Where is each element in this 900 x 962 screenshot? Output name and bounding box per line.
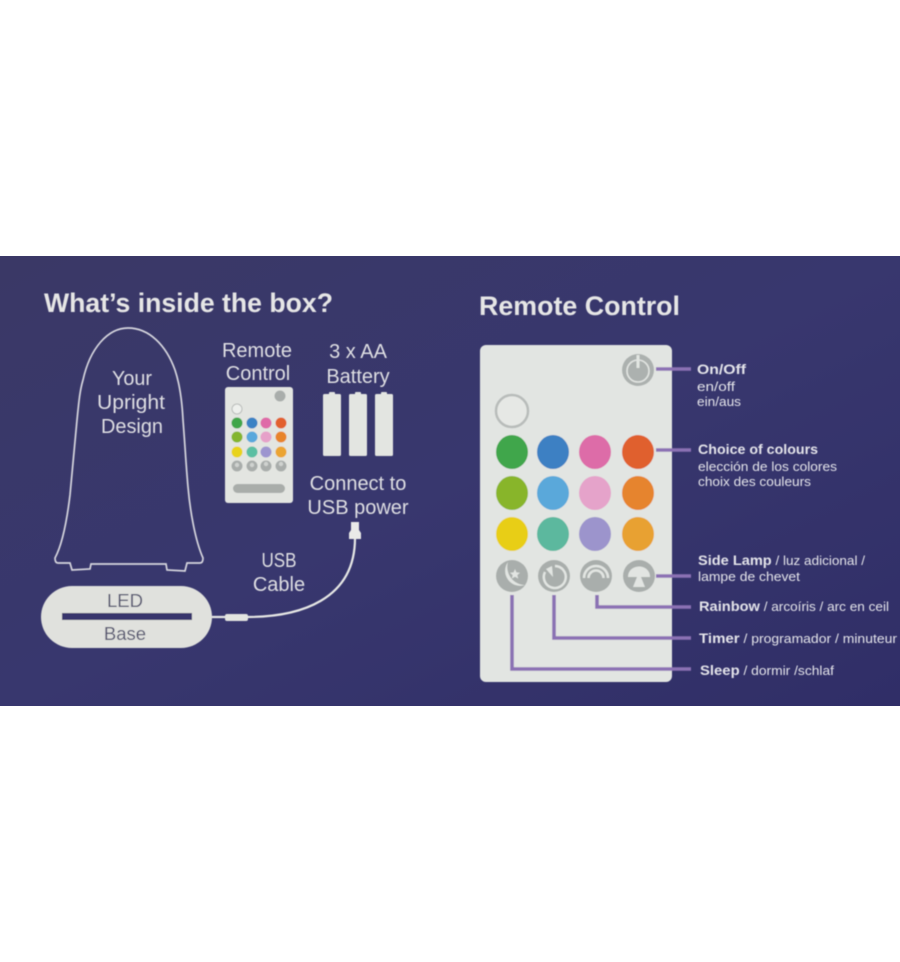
colour buttons [496,435,654,551]
heading: remote control: Remote Control [479,291,680,321]
icon: LED base [41,586,212,648]
label: 3 x AA battery: Battery [326,366,390,388]
icon: USB cable and plug [212,522,361,621]
label: remote control: Control [226,363,290,385]
button: side lamp [623,560,655,592]
panel: what's inside the box [41,288,409,648]
label: your upright design: Design [101,416,163,438]
label: USB cable: USB [262,550,296,572]
callout: choice of colours [698,442,838,489]
label: your upright design: Upright [97,392,165,414]
label: connect to USB power: USB power [307,497,409,519]
button: power [622,354,654,386]
label: remote control: Remote [222,340,292,362]
button: white [496,395,528,427]
callout: choice of colours: elección de los colores [698,459,838,474]
label: your upright design: Your [112,368,152,390]
panel: dark blue banner [0,256,900,706]
icon: LED base: LED [107,590,143,611]
callout lines [512,369,691,669]
callout: side lamp: Side Lamp / luz adicional / [698,552,865,568]
callout: side lamp: lampe de chevet [698,569,800,584]
callout: on/off: On/Off [697,362,747,377]
heading: what's inside the box: What’s inside the box? [44,288,333,318]
panel: remote control [479,291,898,682]
callout: on/off: ein/aus [697,394,742,409]
icon: LED base: Base [104,623,146,644]
callout: on/off: en/off [697,379,735,394]
callout: sleep: Sleep / dormir /schlaf [700,662,834,678]
callout: timer: Timer / programador / minuteur [699,630,898,646]
icon: small remote control [225,387,293,503]
callout: choice of colours: choix des couleurs [698,474,812,489]
label: USB cable: Cable [253,574,305,596]
label: USB cable [253,550,305,596]
button: rainbow [580,560,612,592]
remote control body [480,345,672,682]
label: connect to USB power [307,473,409,519]
callout: on/off [697,362,747,409]
callout: rainbow: Rainbow / arcoíris / arc en ceil [699,598,889,614]
label: 3 x AA battery [326,341,390,388]
icon: upright design outline [55,328,203,571]
label: your upright design [97,368,165,438]
button: sleep [496,560,528,592]
button: timer [538,560,570,592]
icon: three AA batteries [323,392,393,456]
label: connect to USB power: Connect to [310,473,406,495]
callout: side lamp [698,552,865,584]
callout: choice of colours: Choice of colours [698,442,818,457]
label: 3 x AA battery: 3 x AA [329,341,388,363]
label: remote control [222,340,292,385]
